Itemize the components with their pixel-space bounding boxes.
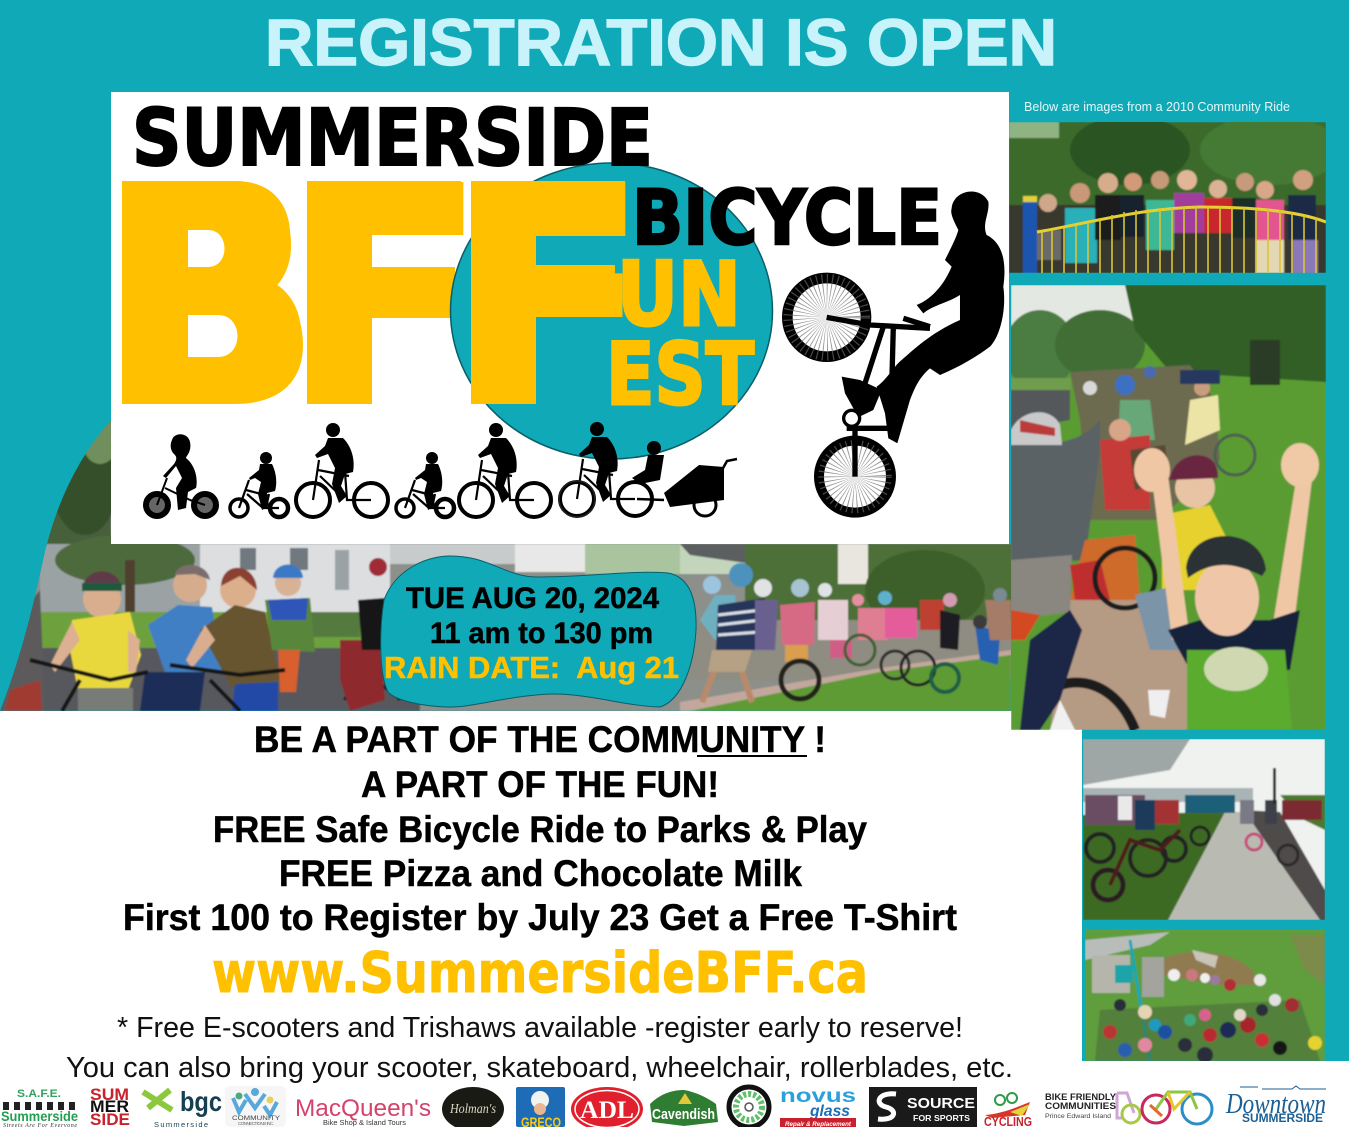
logo: bgc — [143, 1086, 222, 1127]
icon: adult cyclist with child seat — [559, 422, 664, 517]
icon: child cyclist 2 — [230, 452, 288, 517]
icon: bike trailer — [637, 459, 737, 516]
logo: greco — [516, 1087, 565, 1127]
logo: community connections — [225, 1086, 286, 1127]
logo: cavendish farms — [650, 1090, 718, 1126]
event logo panel — [111, 92, 1009, 544]
icon: adult cyclist 2 — [459, 423, 551, 517]
logo: macqueen's: Bike Shop & Island Tours — [323, 1120, 407, 1127]
logo: source for sports: FOR SPORTS — [913, 1114, 971, 1123]
note: free e-scooters: * Free E-scooters and Trishaws available -register early to reserve! — [117, 1012, 963, 1044]
wordmark: BFF: B — [118, 135, 300, 450]
logo: bike friendly communities: Prince Edward Island — [1045, 1114, 1111, 1120]
bikes foreground — [30, 660, 400, 711]
teal circle — [450, 163, 772, 459]
logo: bgc: bgc — [180, 1086, 222, 1117]
sponsor logos strip — [1, 1085, 1326, 1127]
date line: TUE AUG 20, 2024 — [406, 582, 659, 615]
logo: novus glass: novus — [780, 1086, 856, 1107]
wordmark: BFF: F — [303, 135, 460, 450]
note: also bring: You can also bring your scooter, skateboard, wheelchair, rollerblades, etc. — [66, 1052, 1013, 1084]
logo: safe summerside: S.A.F.E. — [17, 1088, 61, 1100]
logo: holman's: Holman's — [449, 1102, 496, 1117]
kid: brown shirt — [186, 568, 280, 711]
photo: group on boardwalk — [1083, 739, 1325, 920]
logo: macqueen's: MacQueen's — [295, 1095, 431, 1122]
logo: bike friendly communities — [1045, 1092, 1116, 1120]
photo: girls on railing — [1009, 115, 1340, 273]
kid: blue shirt — [140, 565, 222, 711]
wordmark: un: UN — [617, 243, 741, 346]
logo: bike friendly communities: COMMUNITIES — [1045, 1101, 1116, 1111]
line: first 100: First 100 to Register by July 23 Get a Free T-Shirt — [123, 897, 957, 938]
logo: novus glass — [780, 1086, 856, 1127]
logo: adl — [571, 1087, 643, 1127]
logo: downtown summerside: SUMMERSIDE — [1242, 1113, 1323, 1125]
logo: bike friendly communities: BIKE FRIENDLY — [1045, 1092, 1116, 1102]
logo: safe summerside — [1, 1088, 78, 1127]
time line: 11 am to 130 pm — [430, 617, 653, 650]
logo: cavendish farms: Cavendish — [652, 1106, 715, 1123]
logo: adl: ADL — [580, 1097, 634, 1124]
caption: community ride: Below are images from a 2010 Community Ride — [1024, 100, 1290, 114]
logo: holman's — [442, 1087, 504, 1127]
crowd right — [700, 563, 1011, 702]
kid: racing jersey — [265, 564, 315, 692]
rain date line: RAIN DATE: Aug 21 — [384, 650, 679, 685]
logo: cycling pei — [984, 1093, 1032, 1127]
headline text block — [123, 719, 957, 938]
icon: adult cyclist 1 — [296, 423, 388, 517]
wordmark: BFF — [118, 135, 772, 459]
logo: source for sports: SOURCE — [907, 1095, 975, 1112]
logo: safe summerside: Summerside — [1, 1109, 78, 1124]
photo: riders cheering with arms raised — [1004, 285, 1326, 730]
photo: aerial group on lawn — [1085, 929, 1325, 1063]
rider in gray jacket — [1011, 412, 1100, 640]
photo: kids and riders on street — [0, 416, 1015, 711]
website url: www.SummersideBFF.ca — [212, 941, 868, 1006]
logo: summerside city: MER — [90, 1097, 129, 1116]
icon: bmx rider silhouette — [787, 192, 1004, 513]
date callout — [381, 556, 696, 707]
line: be a part of the community: BE A PART OF THE COMMUNITY ! — [254, 719, 826, 760]
logo: community connections: COMMUNITY — [232, 1115, 281, 1122]
wordmark: bicycle: BICYCLE — [632, 173, 942, 262]
wordmark: summerside: SUMMERSIDE — [132, 94, 653, 184]
logo: source for sports — [869, 1087, 977, 1127]
logo: novus glass: glass — [809, 1103, 850, 1120]
white lower area — [0, 711, 1349, 1127]
front rider in green shirt — [1134, 443, 1319, 730]
rider in yellow shirt — [1134, 454, 1226, 719]
logo: summerside city — [90, 1085, 130, 1127]
line: free pizza: FREE Pizza and Chocolate Milk — [279, 853, 802, 894]
wordmark: BFF: F — [467, 135, 622, 450]
logo: downtown summerside: Downtown — [1225, 1089, 1326, 1120]
logo: downtown summerside — [1225, 1086, 1326, 1125]
title: registration is open: REGISTRATION IS OPEN — [265, 5, 1057, 79]
wordmark: est: EST — [606, 325, 754, 425]
logo: wheel — [729, 1087, 769, 1127]
icon: child cyclist 3 — [396, 452, 454, 517]
kid: yellow shirt — [50, 571, 141, 711]
line: part of the fun: A PART OF THE FUN! — [361, 764, 719, 805]
logo: summerside city: SUM — [90, 1085, 129, 1104]
icon: multicolor bike — [1117, 1092, 1212, 1124]
logo: community connections: CONNECTIONS INC. — [238, 1121, 274, 1126]
line: free ride: FREE Safe Bicycle Ride to Parks & Play — [213, 809, 867, 850]
icon: child cyclist 1 — [146, 434, 216, 516]
